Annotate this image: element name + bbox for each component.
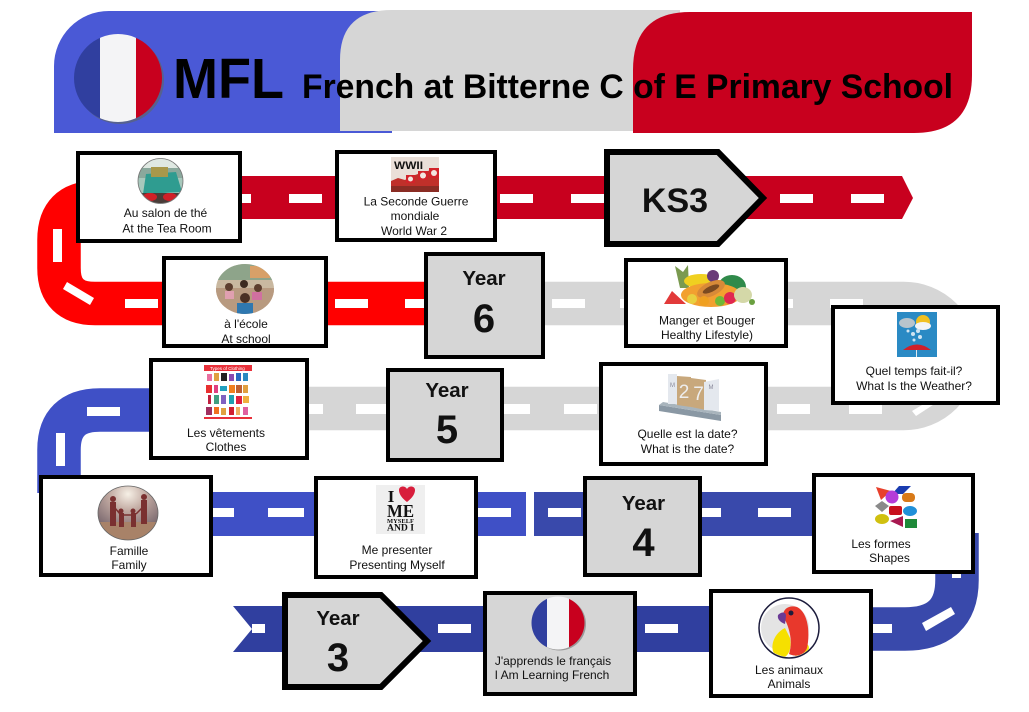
panel: à l'école — [164, 258, 326, 346]
title: school name: French at Bitterne C of E Primary School — [302, 68, 953, 106]
text: healthy lifestyle label — [659, 314, 755, 342]
icon: I love me badge: AND I — [387, 522, 415, 532]
text: tea room label — [122, 206, 212, 236]
text: shapes label — [851, 537, 911, 565]
icon: types of clothing chart — [204, 363, 252, 419]
icon: types of clothing chart: Types of Clothing — [210, 366, 245, 371]
text: animals label: Les animaux — [755, 663, 823, 677]
text: shapes label: Shapes — [869, 551, 910, 565]
road: blue Year 4 row right — [534, 492, 824, 536]
text: WWII label: La Seconde Guerre — [364, 194, 469, 208]
banner: red section — [633, 12, 972, 133]
text: family label: Family — [111, 558, 147, 572]
text: presenting myself label: Presenting Myself — [349, 558, 445, 572]
road: blue Year 5 bend — [59, 410, 160, 493]
heading: Year 3: 3 — [327, 636, 349, 680]
icon: I love me badge: I — [388, 487, 395, 506]
road: lane markings — [53, 194, 961, 633]
panel: Quelle est la date — [601, 364, 766, 464]
icon: family at the beach — [98, 486, 158, 540]
icon: I love me badge: MYSELF — [387, 519, 414, 525]
heading: Year 5 — [425, 379, 469, 452]
panel: Year 5 — [388, 370, 502, 460]
heading: KS3: KS3 — [642, 182, 708, 220]
text: healthy lifestyle label: Healthy Lifestyle) — [661, 328, 753, 342]
text: weather label: What Is the Weather? — [856, 379, 972, 393]
heading: Year 6: 6 — [473, 297, 495, 341]
icon: fruit and vegetables — [664, 265, 755, 307]
text: learning French label — [495, 654, 611, 682]
panel: Les animaux — [711, 591, 871, 696]
icon: classroom — [216, 264, 274, 315]
text: clothes label: Les vêtements — [187, 426, 265, 440]
panel: Manger et Bouger — [626, 260, 786, 346]
text: clothes label: Clothes — [206, 440, 246, 454]
text: family label — [110, 544, 149, 572]
panel: Year 6 — [426, 254, 543, 357]
road: KS3 dark red straight — [230, 176, 913, 219]
icon: block calendar: 7 — [693, 384, 704, 405]
text: family label: Famille — [110, 544, 149, 558]
heading: Year 3: Year — [316, 607, 360, 630]
text: healthy lifestyle label: Manger et Bouger — [659, 314, 755, 328]
panel: La Seconde Guerre mondiale — [337, 152, 495, 240]
road: bright red bend and Year 6 row — [59, 202, 430, 304]
panel: Year 4 — [585, 478, 700, 575]
road: grey Year 6 to Year 5 turn — [300, 304, 956, 408]
heading: Year 4: 4 — [632, 521, 655, 565]
heading: Year 5: 5 — [436, 408, 458, 452]
panel: J'apprends le français — [485, 593, 635, 694]
panel: KS3 arrow — [607, 152, 763, 244]
road: blue Year 4 row left — [200, 492, 526, 536]
icon: weather — [897, 312, 937, 357]
text: school label — [221, 317, 271, 346]
icon: block calendar — [659, 374, 721, 421]
panel: Au salon de thé — [78, 153, 240, 241]
text: animals label — [755, 663, 823, 691]
road: blue right bend — [860, 533, 957, 629]
panel: Year 3 arrow — [285, 595, 427, 687]
text: weather label — [856, 364, 972, 393]
icon: WWII picture: WWII — [394, 160, 423, 172]
panel: Les vêtements — [151, 360, 307, 458]
panel: Famille — [41, 477, 211, 575]
heading: Year 6: Year — [462, 267, 506, 290]
text: animals label: Animals — [768, 677, 810, 691]
panel: title banner — [54, 10, 972, 133]
title: MFL: MFL — [173, 47, 284, 111]
text: learning French label: J'apprends le français — [495, 654, 611, 668]
heading: Year 3 — [316, 607, 360, 680]
text: WWII label — [364, 194, 469, 238]
banner: grey section — [340, 10, 680, 131]
road: Year 3 row — [233, 606, 720, 652]
icon: coloured shapes — [875, 486, 917, 528]
text: presenting myself label: Me presenter — [362, 543, 432, 557]
panel: Me presenter — [316, 478, 476, 577]
text: school label: At school — [221, 332, 271, 346]
heading: Year 6 — [462, 267, 506, 341]
text: presenting myself label — [349, 543, 445, 572]
heading: Year 4: Year — [622, 492, 665, 515]
panel: Quel temps fait-il — [833, 307, 998, 403]
text: shapes label: Les formes — [851, 537, 911, 551]
icon: French flag — [530, 595, 586, 651]
heading: Year 5: Year — [425, 379, 469, 402]
text: tea room label: At the Tea Room — [122, 222, 212, 236]
icon: tea room — [138, 158, 184, 205]
banner: blue section — [54, 11, 392, 133]
text: tea room label: Au salon de thé — [124, 206, 208, 220]
icon: I love me badge — [376, 485, 425, 534]
text: WWII label: World War 2 — [381, 224, 447, 238]
text: school label: à l'école — [224, 317, 268, 331]
icon: parrot — [759, 598, 819, 658]
text: date label — [637, 427, 738, 456]
text: date label: Quelle est la date? — [637, 427, 738, 441]
text: learning French label: I Am Learning French — [495, 668, 609, 682]
panel: Les formes — [814, 475, 973, 572]
text: WWII label: mondiale — [391, 209, 440, 223]
icon: WWII picture — [391, 157, 439, 192]
icon: block calendar: 2 — [679, 382, 689, 403]
icon: block calendar: M — [708, 385, 714, 391]
text: date label: What is the date? — [641, 442, 735, 456]
icon: French flag badge — [74, 34, 164, 124]
heading: Year 4 — [622, 492, 665, 565]
icon: block calendar: M — [670, 383, 675, 389]
text: clothes label — [187, 426, 265, 454]
text: weather label: Quel temps fait-il? — [866, 364, 963, 378]
icon: I love me badge: ME — [387, 501, 414, 521]
